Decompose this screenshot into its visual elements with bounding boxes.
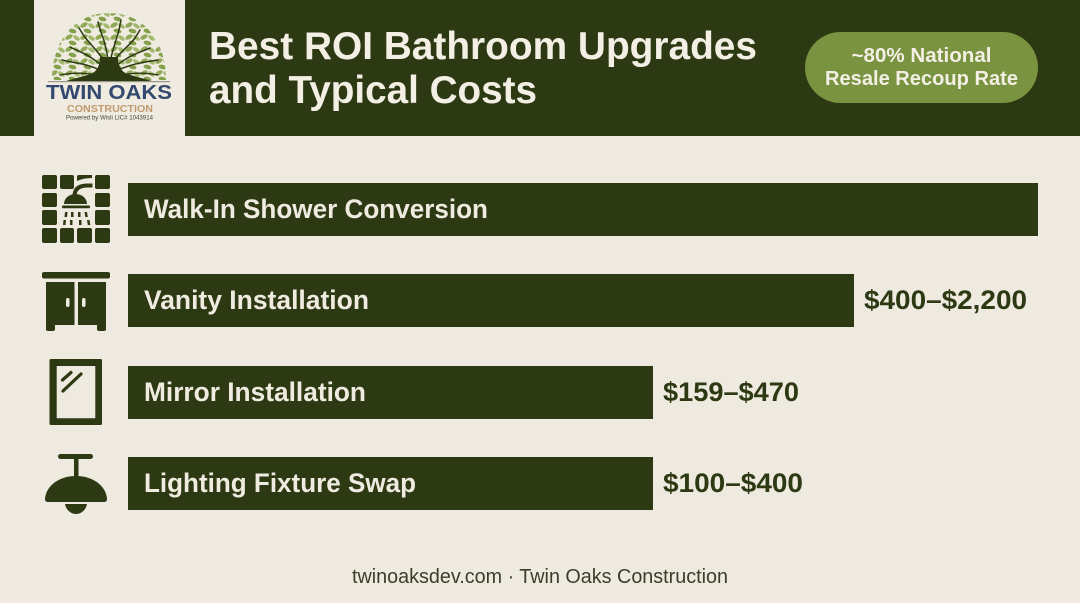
icon: pendant light <box>45 454 107 514</box>
bar: Vanity Installation: Vanity Installation <box>144 285 369 315</box>
bar: Walk-In Shower Conversion: Walk-In Shower Conversion <box>144 194 488 224</box>
logo: Twin Oaks Construction: CONSTRUCTION <box>67 104 153 115</box>
title: Best ROI Bathroom Upgrades <box>209 25 757 68</box>
title: and Typical Costs <box>209 69 537 112</box>
value: mirror cost: $159–$470 <box>663 377 799 407</box>
callout: national recoup rate: Resale Recoup Rate <box>825 68 1018 90</box>
header band <box>0 0 1080 136</box>
logo: Twin Oaks Construction <box>34 0 185 136</box>
bar: Vanity Installation <box>128 274 854 327</box>
icon: vanity <box>42 272 110 331</box>
bar: Walk-In Shower Conversion <box>128 183 1038 236</box>
value: vanity cost: $400–$2,200 <box>864 285 1027 315</box>
value: lighting cost: $100–$400 <box>663 468 803 498</box>
logo wordmark: TWIN OAKS <box>46 82 172 104</box>
logo: Twin Oaks Construction: Powered by Wisli LIC# 1043914 <box>66 116 154 122</box>
logo tree <box>60 20 158 75</box>
logo leaves <box>50 10 168 81</box>
icon: mirror <box>50 359 102 425</box>
bar: Lighting Fixture Swap: Lighting Fixture Swap <box>144 468 416 498</box>
bar: Mirror Installation: Mirror Installation <box>144 377 366 407</box>
callout: national recoup rate: ~80% National <box>852 45 992 67</box>
footer: twinoaksdev.com · Twin Oaks Construction <box>352 566 728 588</box>
bar: Mirror Installation <box>128 366 653 419</box>
callout: national recoup rate <box>805 32 1038 103</box>
icon: shower tiles <box>42 175 110 243</box>
bar: Lighting Fixture Swap <box>128 457 653 510</box>
title <box>209 25 757 112</box>
